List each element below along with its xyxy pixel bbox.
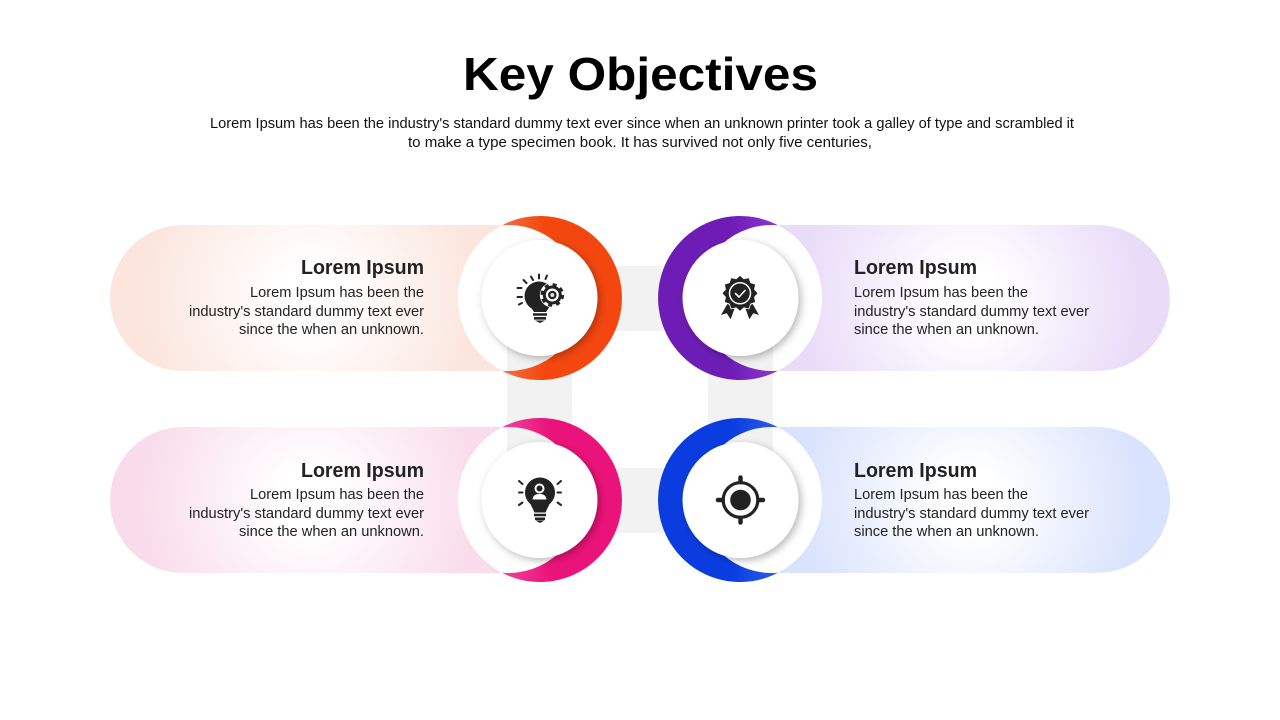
body text — [854, 285, 1089, 338]
icon: light bulb with person — [519, 478, 561, 523]
pink crescent — [502, 418, 622, 582]
body text — [854, 487, 1089, 540]
heading: Lorem Ipsum — [854, 460, 977, 482]
pill background — [773, 427, 1170, 573]
body text: since the when an unknown. — [854, 322, 1039, 338]
body text: Lorem Ipsum has been the — [250, 487, 424, 503]
panel: bottom right objective — [658, 418, 1170, 582]
icon: award badge — [721, 275, 759, 319]
panel: top right objective — [658, 216, 1170, 380]
panel: top left objective — [110, 216, 622, 380]
body text: Lorem Ipsum has been the — [250, 285, 424, 301]
white hub circle — [682, 442, 798, 558]
white cut-out — [458, 425, 507, 575]
body text: since the when an unknown. — [239, 322, 424, 338]
title: Key Objectives — [463, 48, 818, 100]
orange crescent — [502, 216, 622, 380]
icon: light bulb with gear — [518, 274, 565, 323]
body text: industry's standard dummy text ever — [189, 506, 424, 522]
purple crescent — [658, 216, 778, 380]
body text — [189, 487, 424, 540]
body text: since the when an unknown. — [239, 524, 424, 540]
white hub circle — [482, 240, 598, 356]
body text: industry's standard dummy text ever — [854, 304, 1089, 320]
subtitle text: to make a type specimen book. It has survived not only five centuries, — [408, 135, 872, 151]
white cut-out — [458, 223, 507, 373]
white hub circle — [682, 240, 798, 356]
body text: since the when an unknown. — [854, 524, 1039, 540]
subtitle text: Lorem Ipsum has been the industry's standard dummy text ever since when an unknown printer took a galley of type and scrambled it — [210, 116, 1074, 132]
white cut-out — [773, 223, 822, 373]
subtitle text — [210, 116, 1074, 151]
heading: Lorem Ipsum — [301, 257, 424, 279]
body text: industry's standard dummy text ever — [189, 304, 424, 320]
heading: Lorem Ipsum — [301, 460, 424, 482]
white cut-out — [773, 425, 822, 575]
heading: Lorem Ipsum — [854, 257, 977, 279]
pill background — [110, 427, 507, 573]
pill background — [773, 225, 1170, 371]
body text — [189, 285, 424, 338]
blue crescent — [658, 418, 778, 582]
grey connector frame — [507, 266, 773, 533]
white hub circle — [482, 442, 598, 558]
panel: bottom left objective — [110, 418, 622, 582]
body text: Lorem Ipsum has been the — [854, 487, 1028, 503]
body text: Lorem Ipsum has been the — [854, 285, 1028, 301]
pill background — [110, 225, 507, 371]
icon: target — [718, 478, 763, 522]
body text: industry's standard dummy text ever — [854, 506, 1089, 522]
